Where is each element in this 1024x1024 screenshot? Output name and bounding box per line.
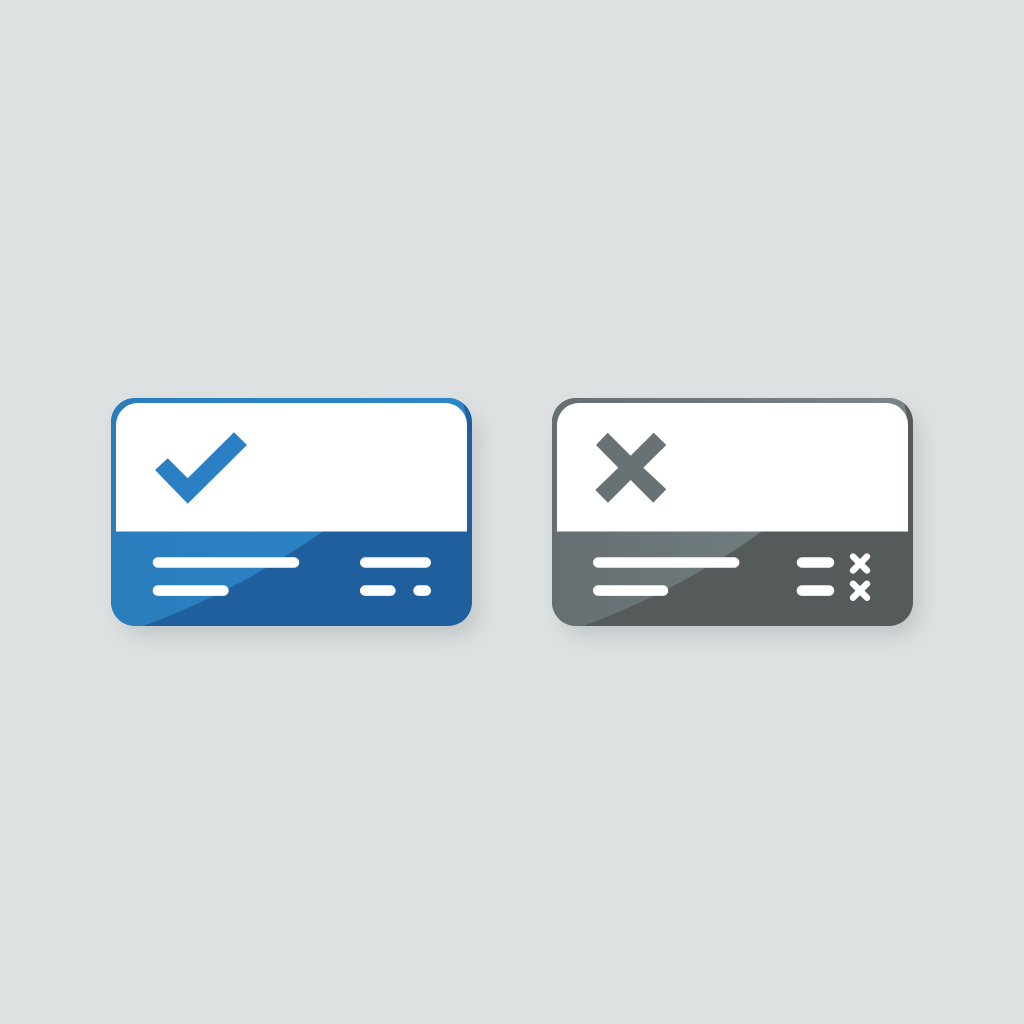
text placeholder lines: right xyxy=(797,557,834,596)
text placeholder lines: right xyxy=(360,557,431,596)
panel: blue card with check mark xyxy=(111,398,478,636)
icon: cross mark xyxy=(595,433,666,503)
card shadow: gray xyxy=(561,410,919,636)
icon: small cross marks xyxy=(853,556,867,598)
text placeholder lines: left xyxy=(593,557,740,596)
top and left edge highlight: blue xyxy=(111,398,467,626)
icon: check mark xyxy=(155,432,247,504)
white upper area: blue card xyxy=(116,403,467,532)
text placeholder lines: left xyxy=(153,557,299,596)
card body: gray xyxy=(552,398,913,626)
card body: blue xyxy=(111,398,472,626)
card shadow: blue xyxy=(120,410,478,636)
white upper area: gray card xyxy=(557,403,908,532)
top and left edge highlight: gray xyxy=(552,398,908,626)
panel: gray card with cross mark xyxy=(552,398,919,636)
